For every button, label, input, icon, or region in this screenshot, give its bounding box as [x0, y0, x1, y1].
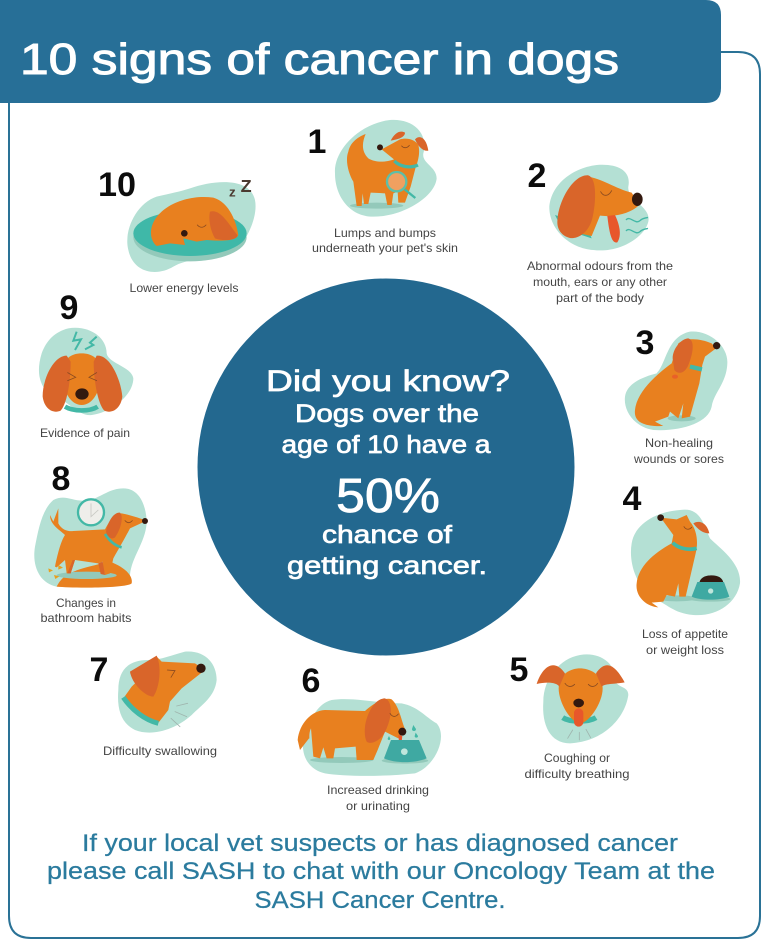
label: Loss of appetite [642, 627, 728, 641]
icon: dog with accident and clock [34, 488, 148, 588]
label [527, 259, 673, 305]
label: difficulty breathing [524, 767, 630, 781]
icon: dog with sore throat [118, 652, 217, 733]
callout heading: Did you know? [266, 365, 510, 398]
label [40, 596, 132, 625]
label: or urinating [346, 799, 410, 813]
label: underneath your pet's skin [312, 241, 458, 255]
number 6: 6 [302, 662, 320, 700]
label: or weight loss [646, 643, 724, 657]
icon: dog coughing [537, 654, 628, 743]
sign 5 [510, 651, 630, 781]
label [642, 627, 728, 657]
snore letters [229, 176, 252, 200]
sign 3 [625, 324, 727, 466]
number 5: 5 [510, 651, 528, 689]
label [312, 226, 458, 255]
sign 1 [308, 120, 458, 255]
footer call to action [47, 830, 715, 914]
sign 7 [90, 651, 217, 758]
title banner [0, 0, 721, 103]
label: Increased drinking [327, 783, 429, 797]
label: wounds or sores [633, 452, 724, 466]
icon: dog ignoring food bowl [631, 510, 740, 615]
icon: sitting dog with wound [625, 332, 727, 430]
label [524, 751, 630, 781]
number 1: 1 [308, 123, 326, 161]
label: Changes in [56, 596, 116, 610]
number 7: 7 [90, 651, 108, 689]
footer call to action: If your local vet suspects or has diagnosed cancer [82, 830, 678, 857]
snore letters: z [229, 185, 236, 200]
label: Difficulty swallowing [103, 744, 217, 758]
title: 10 signs of cancer in dogs [20, 35, 619, 84]
footer call to action: please call SASH to chat with our Oncology Team at the [47, 858, 715, 885]
sign 2 [527, 157, 673, 305]
central circle callout [198, 278, 574, 656]
callout text line 4: getting cancer. [287, 552, 487, 580]
icon: dog in pain [39, 328, 133, 415]
number 10: 10 [98, 166, 136, 204]
snore letters: Z [241, 176, 252, 196]
label: Abnormal odours from the [527, 259, 673, 273]
label: part of the body [556, 291, 644, 305]
sign 8 [34, 460, 148, 625]
number 2: 2 [528, 157, 546, 195]
sign 6 [298, 662, 441, 813]
icon: dog drinking from bowl [298, 698, 441, 776]
label: Non-healing [645, 436, 713, 450]
label: Evidence of pain [40, 426, 130, 440]
icon: sleeping dog [127, 176, 256, 272]
sign 10 [98, 166, 256, 295]
sign 9 [39, 289, 133, 440]
number 3: 3 [636, 324, 654, 362]
sign 4 [623, 480, 740, 657]
label: mouth, ears or any other [533, 275, 667, 289]
label: Coughing or [544, 751, 610, 765]
callout text: Dogs over the [295, 400, 479, 428]
footer call to action: SASH Cancer Centre. [254, 887, 506, 914]
number 8: 8 [52, 460, 70, 498]
icon: dog with magnifier on lump [335, 120, 437, 217]
callout text line 3: chance of [322, 521, 452, 549]
statistic: 50% [336, 470, 440, 523]
callout text line 2: age of 10 have a [282, 431, 491, 459]
icon: dog with bad odour [549, 165, 649, 250]
label [633, 436, 724, 466]
label: bathroom habits [40, 611, 132, 625]
label [327, 783, 429, 813]
number 4: 4 [623, 480, 642, 518]
number 9: 9 [60, 289, 78, 327]
label: Lumps and bumps [334, 226, 436, 240]
label: Lower energy levels [130, 281, 238, 295]
